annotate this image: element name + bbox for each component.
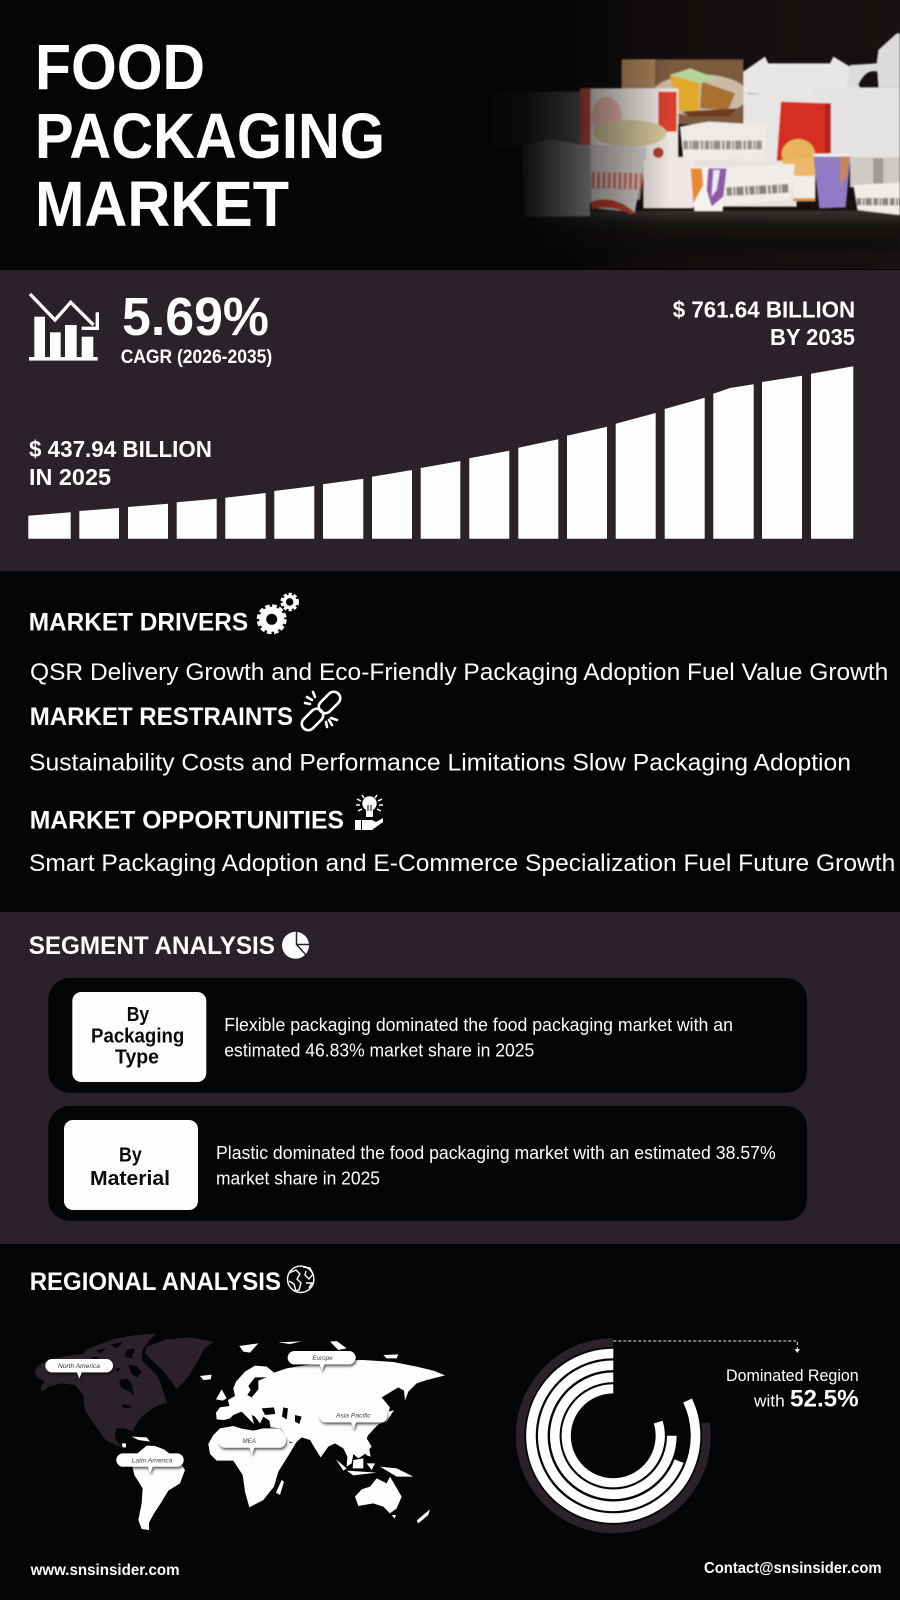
value label: 2025: [29, 436, 212, 490]
label: by material: Material: [90, 1167, 170, 1190]
region: other continents: [122, 1341, 445, 1530]
heading: segment analysis: SEGMENT ANALYSIS: [29, 932, 275, 960]
footer: contact: Contact@snsinsider.com: [704, 1560, 882, 1577]
icon: declining chart: [29, 294, 98, 361]
text: packaging type: estimated 46.83% market share in 2025: [224, 1041, 534, 1061]
callout: Latin America: Latin America: [132, 1458, 173, 1465]
text: opportunities: Smart Packaging Adoption and E-Commerce Specialization Fuel Future Growth: [29, 850, 895, 877]
panel: market size: [0, 270, 900, 571]
icon: idea in hand: [355, 795, 383, 830]
label: by packaging type: Packaging: [91, 1024, 184, 1047]
title: [35, 31, 385, 240]
heading: market restraints: MARKET RESTRAINTS: [30, 703, 293, 731]
callout: MEA: [218, 1434, 286, 1455]
CAGR label: CAGR (2026-2035): [121, 347, 272, 368]
world map: [35, 1333, 445, 1530]
callout: MEA: MEA: [242, 1438, 257, 1445]
text: material: market share in 2025: [216, 1168, 380, 1188]
value label: 2035: BY 2035: [770, 324, 855, 350]
callout: dominated region: with: [753, 1393, 785, 1411]
text: drivers: QSR Delivery Growth and Eco-Friendly Packaging Adoption Fuel Value Growth: [30, 659, 888, 686]
label: by material: [64, 1120, 198, 1210]
icon: broken chain: [299, 689, 343, 733]
label: by packaging type: [72, 992, 206, 1082]
icon: gears: [258, 594, 298, 633]
CAGR value: 5.69%: [122, 287, 269, 347]
label: by material: By: [119, 1144, 142, 1167]
title: PACKAGING: [35, 100, 385, 172]
heading: market drivers: MARKET DRIVERS: [29, 609, 248, 637]
text: packaging type: Flexible packaging dominated the food packaging market with an: [224, 1015, 733, 1035]
footer: website: www.snsinsider.com: [30, 1562, 180, 1579]
value label: 2035: $ 761.64 BILLION: [673, 297, 855, 323]
region: North America (dominant): [35, 1333, 213, 1447]
value label: 2025: $ 437.94 BILLION: [29, 436, 212, 462]
callout: dominated region: [726, 1367, 859, 1413]
text: restraints: Sustainability Costs and Performance Limitations Slow Packaging Adoption: [29, 749, 851, 776]
heading: regional analysis: REGIONAL ANALYSIS: [30, 1268, 281, 1296]
panel: segment analysis: [0, 912, 900, 1244]
callout: North America: [45, 1359, 113, 1379]
callout: Europe: Europe: [312, 1355, 333, 1362]
bar chart: market growth: [28, 366, 853, 539]
icon: pie chart: [282, 931, 310, 959]
panel: regional analysis: [30, 1266, 859, 1530]
text: material: Plastic dominated the food packaging market with an estimated 38.57%: [216, 1143, 776, 1163]
callout: Europe: [288, 1351, 356, 1371]
panel: header: [0, 0, 900, 270]
card: by material: [48, 1106, 807, 1221]
card: by packaging type: [48, 978, 807, 1093]
value label: 2025: IN 2025: [29, 464, 111, 490]
text: material: [216, 1143, 776, 1188]
value label: 2035: [673, 297, 855, 350]
callout: Latin America: [116, 1453, 184, 1473]
title: MARKET: [35, 168, 289, 240]
callout: North America: North America: [58, 1363, 100, 1370]
label: by packaging type: Type: [115, 1045, 159, 1068]
panel: market dynamics: [0, 571, 900, 912]
arrow: dashed leader: [613, 1341, 800, 1353]
photo: food packaging products: [470, 0, 900, 269]
callout: dominated region: 52.5%: [790, 1386, 859, 1413]
icon: globe: [288, 1266, 314, 1293]
callout: Asia Pacific: [319, 1409, 387, 1429]
radial chart: [520, 1343, 707, 1529]
label: by packaging type: By: [127, 1003, 150, 1026]
callout: Asia Pacific: Asia Pacific: [335, 1413, 371, 1420]
text: packaging type: [224, 1015, 733, 1061]
callout: dominated region: Dominated Region: [726, 1367, 859, 1385]
title: FOOD: [35, 31, 205, 103]
heading: market opportunities: MARKET OPPORTUNITIES: [30, 806, 344, 834]
